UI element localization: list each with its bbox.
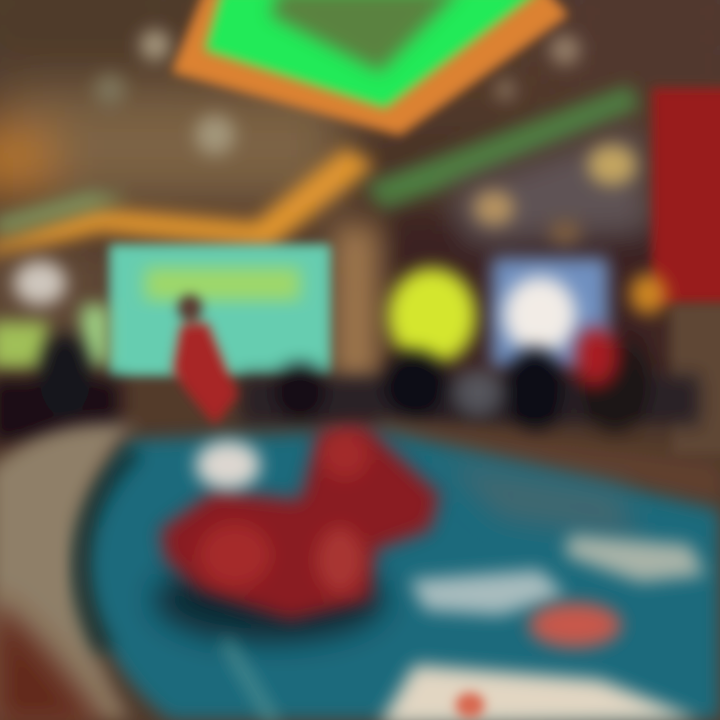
ceiling lights (94, 30, 580, 155)
carpet grey patch (440, 460, 640, 540)
lower orange and green ceiling stripes (0, 85, 640, 268)
presenter in red (172, 294, 238, 425)
floor edge (0, 423, 135, 720)
yellow and white screens (388, 258, 608, 368)
wall lamps (474, 145, 666, 314)
back wall (0, 125, 670, 395)
red wall panel (652, 88, 720, 303)
white cards on the table (380, 535, 705, 720)
teal carpet (86, 430, 720, 720)
wooden rail (370, 420, 720, 505)
red chip pile (155, 425, 440, 642)
audience silhouettes (0, 327, 700, 443)
green ceiling panel with orange frame (172, 0, 568, 135)
ceiling (0, 0, 720, 250)
left screens (0, 261, 108, 368)
wooden column (672, 305, 720, 455)
teal screen (110, 245, 330, 375)
carpet light streak (225, 640, 275, 720)
